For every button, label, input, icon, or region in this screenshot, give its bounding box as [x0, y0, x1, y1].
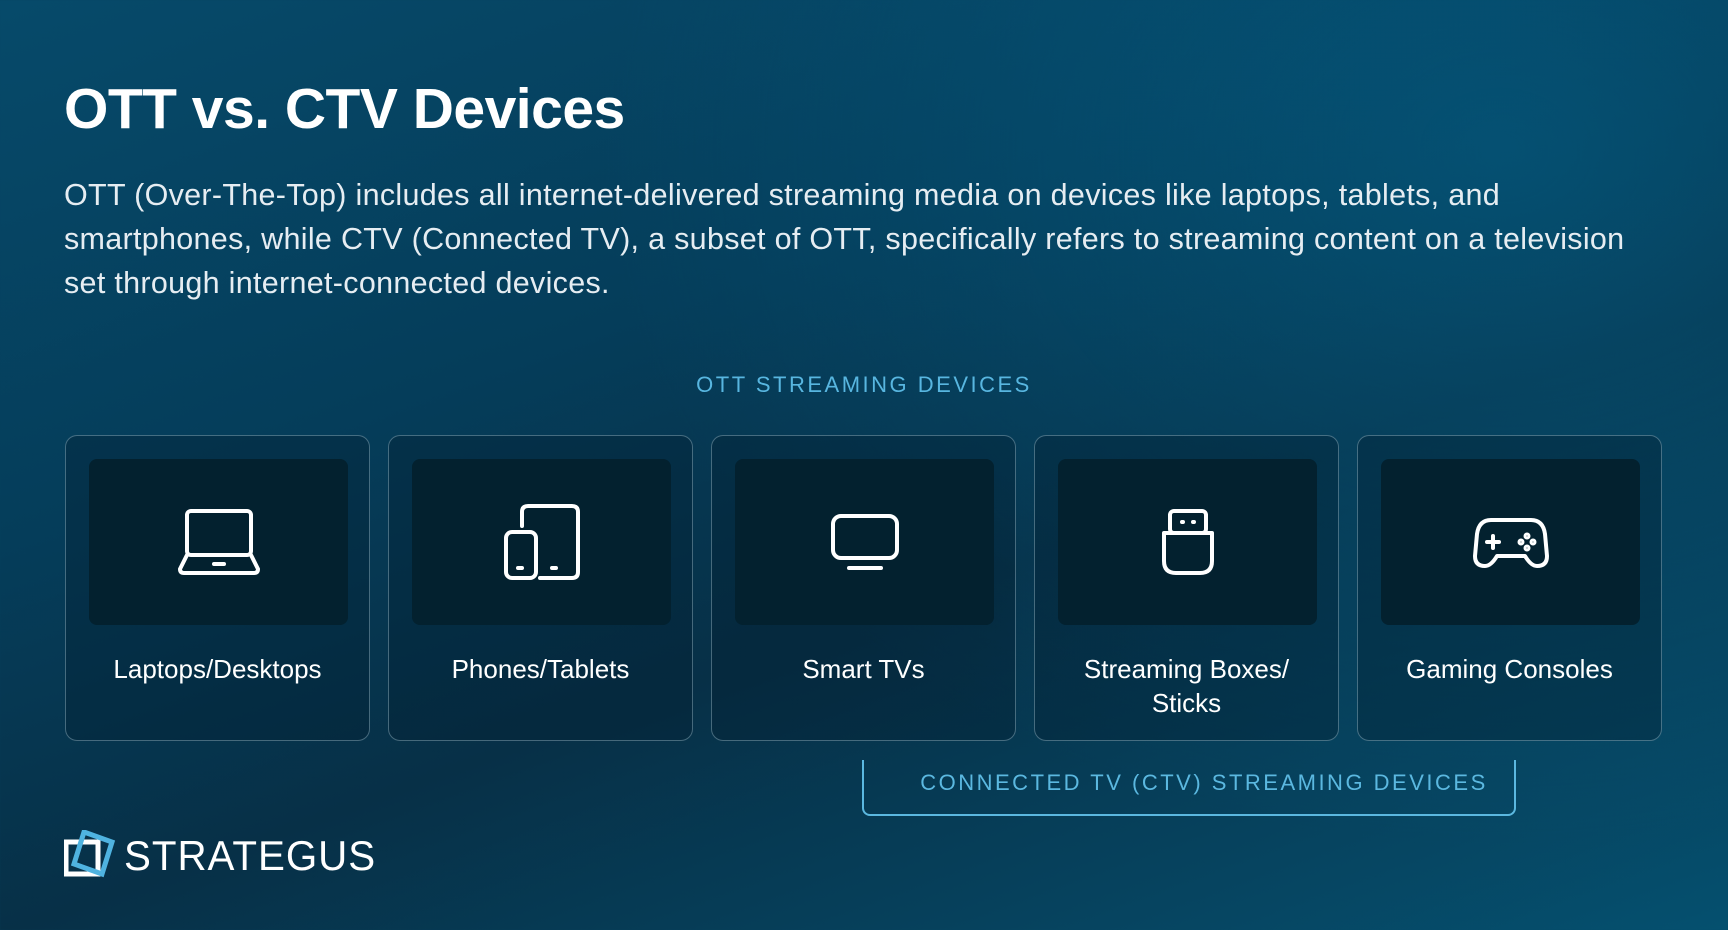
bracket: CTV devices: [862, 760, 1516, 816]
card: laptops: [65, 435, 370, 741]
icon: streaming stick: [1058, 459, 1317, 625]
label: [1084, 654, 1290, 718]
label: Gaming Consoles: [1406, 654, 1613, 684]
logo: Strategus: STRATEGUS: [124, 832, 376, 879]
card: gaming consoles: [1357, 435, 1662, 741]
section heading: OTT: OTT STREAMING DEVICES: [696, 372, 1032, 397]
card: smart tvs: [711, 435, 1016, 741]
description paragraph: smartphones, while CTV (Connected TV), a subset of OTT, specifically refers to streaming content on a television: [64, 222, 1624, 256]
card: phones: [388, 435, 693, 741]
bracket: CTV devices: CONNECTED TV (CTV) STREAMING DEVICES: [920, 770, 1488, 795]
label: Sticks: [1152, 688, 1221, 718]
icon: tv: [735, 459, 994, 625]
label: Smart TVs: [802, 654, 925, 684]
icon: phone and tablet: [412, 459, 671, 625]
description paragraph: set through internet-connected devices.: [64, 266, 610, 300]
label: Streaming Boxes/: [1084, 654, 1289, 684]
title: OTT vs. CTV Devices: [64, 77, 625, 141]
description paragraph: [64, 178, 1624, 300]
label: Laptops/Desktops: [113, 654, 322, 684]
description paragraph: OTT (Over-The-Top) includes all internet-delivered streaming media on devices like laptops, tablets, and: [64, 178, 1500, 212]
label: Phones/Tablets: [452, 654, 629, 684]
card: streaming boxes: [1034, 435, 1339, 741]
icon: gamepad: [1381, 459, 1640, 625]
icon: laptop: [89, 459, 348, 625]
